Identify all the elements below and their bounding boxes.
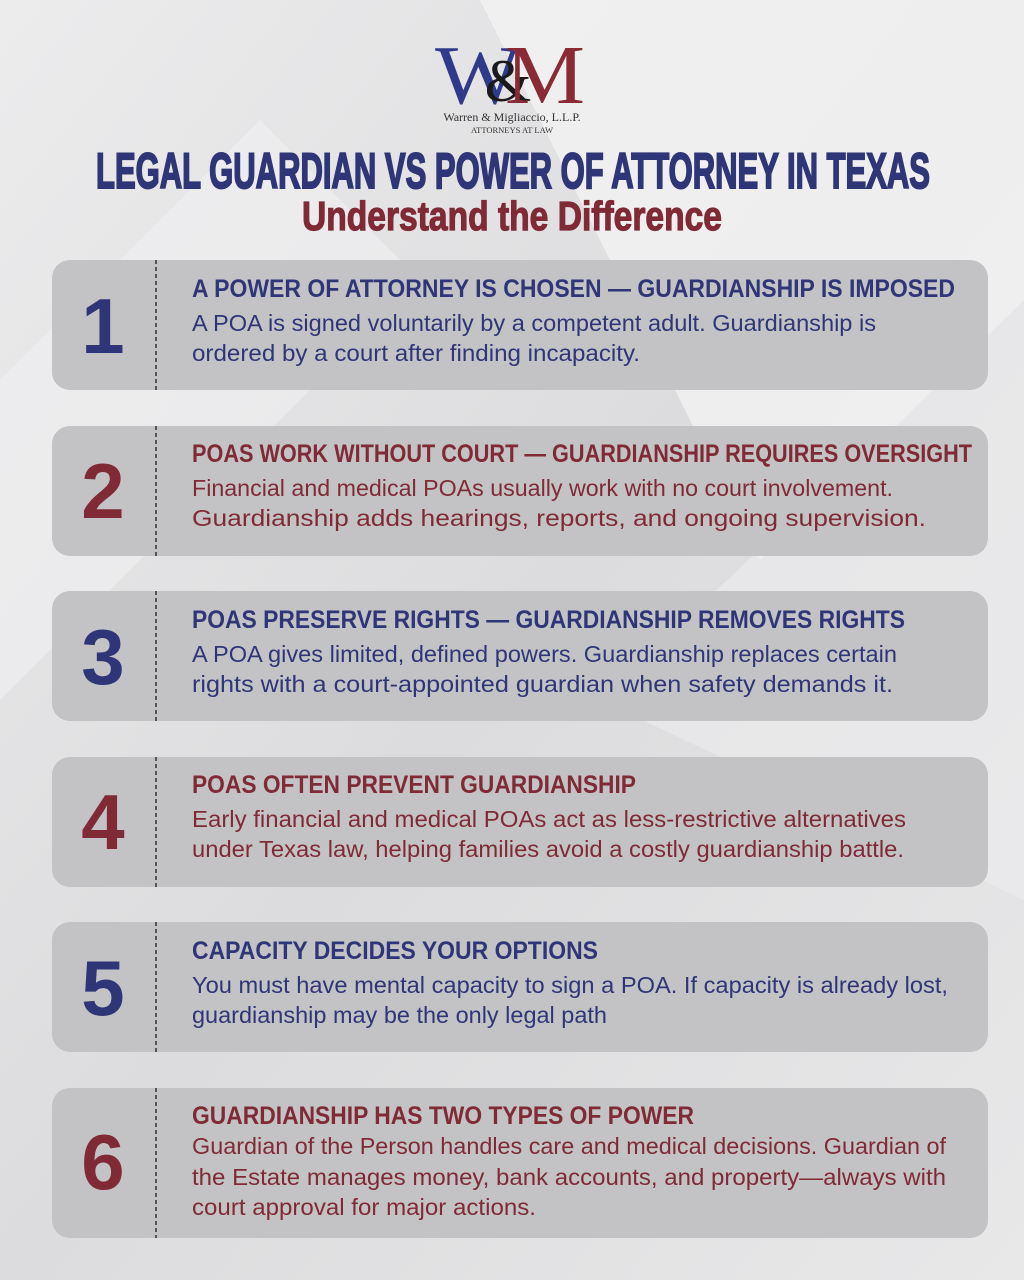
card 4: Early financial and medical POAs act as less-restrictive alternatives [192, 806, 906, 832]
logo: ATTORNEYS AT LAW [471, 125, 553, 135]
logo: & [485, 48, 531, 114]
card 3: rights with a court-appointed guardian when safety demands it. [192, 671, 893, 697]
card 2 [52, 426, 988, 556]
logo [435, 29, 585, 135]
card 1: A POWER OF ATTORNEY IS CHOSEN — GUARDIANSHIP IS IMPOSED [192, 275, 955, 303]
card 4: POAS OFTEN PREVENT GUARDIANSHIP [192, 771, 636, 799]
card 6: court approval for major actions. [192, 1194, 536, 1220]
card 6: Guardian of the Person handles care and medical decisions. Guardian of [192, 1133, 947, 1159]
logo: W [435, 29, 522, 122]
card 2: 2 [81, 447, 125, 535]
card 3: POAS PRESERVE RIGHTS — GUARDIANSHIP REMOVES RIGHTS [192, 606, 905, 634]
card 3: A POA gives limited, defined powers. Guardianship replaces certain [192, 641, 897, 667]
card 2: Financial and medical POAs usually work with no court involvement. [192, 475, 893, 501]
card 1 [52, 260, 988, 390]
card 5: guardianship may be the only legal path [192, 1002, 607, 1028]
card 6: the Estate manages money, bank accounts, and property—always with [192, 1164, 946, 1190]
card 4: 4 [81, 778, 125, 866]
card 6 [52, 1088, 988, 1238]
card 3 [52, 591, 988, 721]
card 4: under Texas law, helping families avoid a costly guardianship battle. [192, 836, 904, 862]
card 5 [52, 922, 988, 1052]
card 1: 1 [81, 282, 125, 370]
subtitle: Understand the Difference [302, 193, 722, 239]
card 5: You must have mental capacity to sign a POA. If capacity is already lost, [192, 972, 948, 998]
card 4 [52, 757, 988, 887]
card 5: CAPACITY DECIDES YOUR OPTIONS [192, 937, 598, 965]
card 2: Guardianship adds hearings, reports, and ongoing supervision. [192, 505, 926, 531]
card 3: 3 [81, 613, 125, 701]
card 5: 5 [81, 944, 125, 1032]
card 1: ordered by a court after finding incapacity. [192, 340, 640, 366]
card 6: GUARDIANSHIP HAS TWO TYPES OF POWER [192, 1102, 694, 1130]
logo: M [505, 29, 585, 122]
card 6: 6 [81, 1118, 125, 1206]
card 1: A POA is signed voluntarily by a competent adult. Guardianship is [192, 310, 876, 336]
logo: Warren & Migliaccio, L.L.P. [443, 110, 581, 124]
